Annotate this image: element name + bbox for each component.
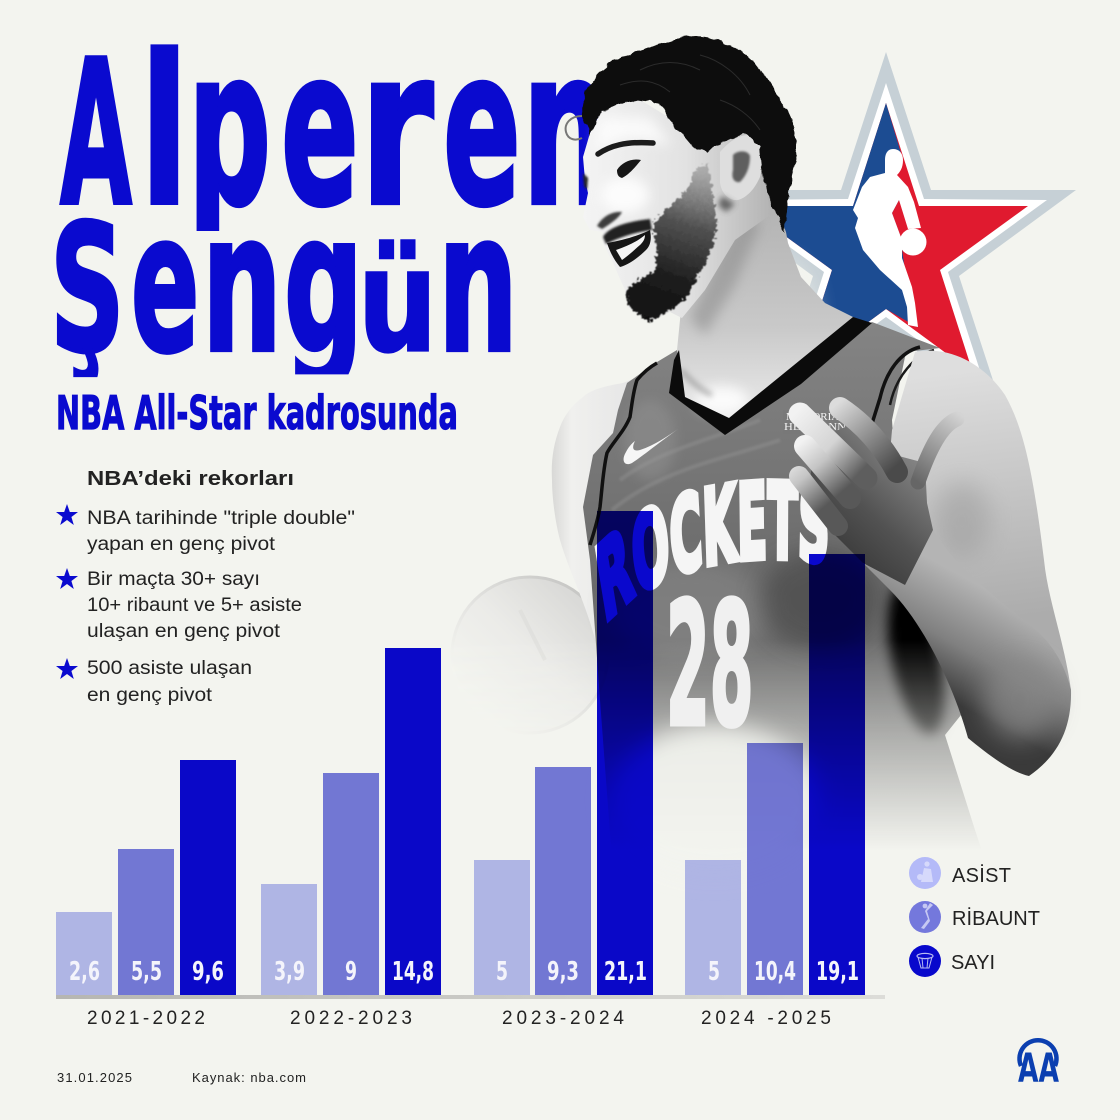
cheek highlight [601,177,649,213]
neck and chest [677,190,855,420]
record 2: ulaşan en genç pivot [87,621,281,642]
jersey patch: HERMANN [784,421,846,433]
mouth [607,230,651,267]
bar values: 9,3 [547,957,579,987]
records list [56,468,355,706]
source: Kaynak: nba.com [192,1070,306,1085]
records heading: NBA’deki rekorları [87,468,294,490]
bar chart [56,511,885,1029]
record 1: NBA tarihinde "triple double" [87,508,355,529]
title: Alperen: p [188,3,271,255]
fade of lower jersey [610,725,820,875]
hand palm and finger bases [810,425,933,585]
bar values: 14,8 [392,957,434,987]
jersey swoosh [624,429,678,464]
record 2: 10+ ribaunt ve 5+ asiste [87,595,302,616]
record 1: yapan en genç pivot [87,534,276,555]
text: g [284,172,363,396]
legend icon: hoop [909,945,941,977]
star bullet 1 [56,504,78,525]
AA logo [1018,1040,1059,1092]
NBA logo player silhouette [853,149,921,327]
bar values [69,957,859,987]
legend icon: rebound [909,901,941,933]
title: Alperen: e [443,3,521,255]
title: Alperen [59,3,612,255]
left arm [552,380,632,640]
text: Ş [50,187,125,392]
text: n [438,172,517,396]
bars 2021-2022 [56,760,236,995]
record 3 [87,658,252,706]
forehead highlight [595,118,672,150]
beard [625,163,717,322]
upper arm shadow [934,482,990,558]
bar values: 5 [496,957,508,987]
bar values: 3,9 [274,957,305,987]
far eye [583,173,588,190]
season labels: 2021-2022 [87,1008,205,1029]
jersey patch: MEMORIAL [786,412,846,423]
bar values: 5 [708,957,720,987]
eye [617,159,641,178]
record 3: 500 asiste ulaşan [87,658,252,679]
right shoulder and upper arm [886,351,1071,690]
title: Alperen: l [140,12,189,252]
season labels: 2023-2024 [502,1008,624,1029]
bar values: 21,1 [604,957,647,987]
text: ü [358,219,437,384]
bars 2024-2025 [685,554,865,995]
basketball in left hand [452,577,608,733]
bar values: 2,6 [69,957,100,987]
bar values: 9 [345,957,357,987]
text: e [131,172,199,396]
elbow shading [984,660,1056,740]
legend icon: assist [909,857,941,889]
jersey patch [783,410,849,434]
title: Alperen: A [60,18,132,251]
player photo illustration [455,35,1072,836]
record 3: en genç pivot [87,685,213,706]
season labels: 2022-2023 [290,1008,412,1029]
teeth [616,235,645,260]
season labels [87,1008,831,1029]
star bullet 3 [56,658,78,679]
baseline [56,995,885,999]
jersey number 28: 28 [666,567,754,765]
bars 2023-2024 [474,511,653,995]
bar values: 10,4 [754,957,796,987]
season labels: 2024 -2025 [701,1008,831,1029]
record 1 [87,508,355,555]
legend label: score: SAYI [951,952,995,974]
hair strands [620,55,760,130]
NBA All-Star star logo [696,52,1076,414]
jersey piping right [870,347,920,430]
AA logo: AA [1018,1046,1059,1092]
legend [909,857,1040,977]
text: n [202,172,281,396]
fingers [799,408,957,526]
mustache [603,219,652,244]
title: Alperen: n [522,3,612,255]
forearm [863,528,1071,776]
record 2: Bir maçta 30+ sayı [87,569,260,590]
bar values: 19,1 [816,957,859,987]
nose shadow [597,212,622,229]
ear [718,135,762,212]
stray curl [566,116,582,140]
legend label: assist: ASİST [952,864,1011,887]
title: Şengün [56,172,517,396]
title: Alperen: e [281,3,359,255]
jersey collar [669,317,872,435]
jersey piping left [590,363,657,545]
subtitle: NBA All-Star kadrosunda [56,386,458,440]
star bullet 2 [56,568,78,589]
eyebrow [598,143,653,154]
NBA logo basketball [900,228,926,256]
legend label: rebound: RİBAUNT [952,907,1040,930]
title: Alperen: r [360,3,433,255]
record 2 [87,569,302,642]
bar values: 5,5 [131,957,162,987]
jersey folds [612,420,780,510]
jersey wordmark ROCKETS: ROCKETS [594,478,828,624]
bars 2022-2023 [261,648,441,995]
torso and jersey [583,322,985,860]
soft fade over lower-left star [744,263,812,373]
hair [582,37,797,232]
bar values: 9,6 [192,957,224,987]
date: 31.01.2025 [57,1070,132,1085]
face [583,98,770,322]
